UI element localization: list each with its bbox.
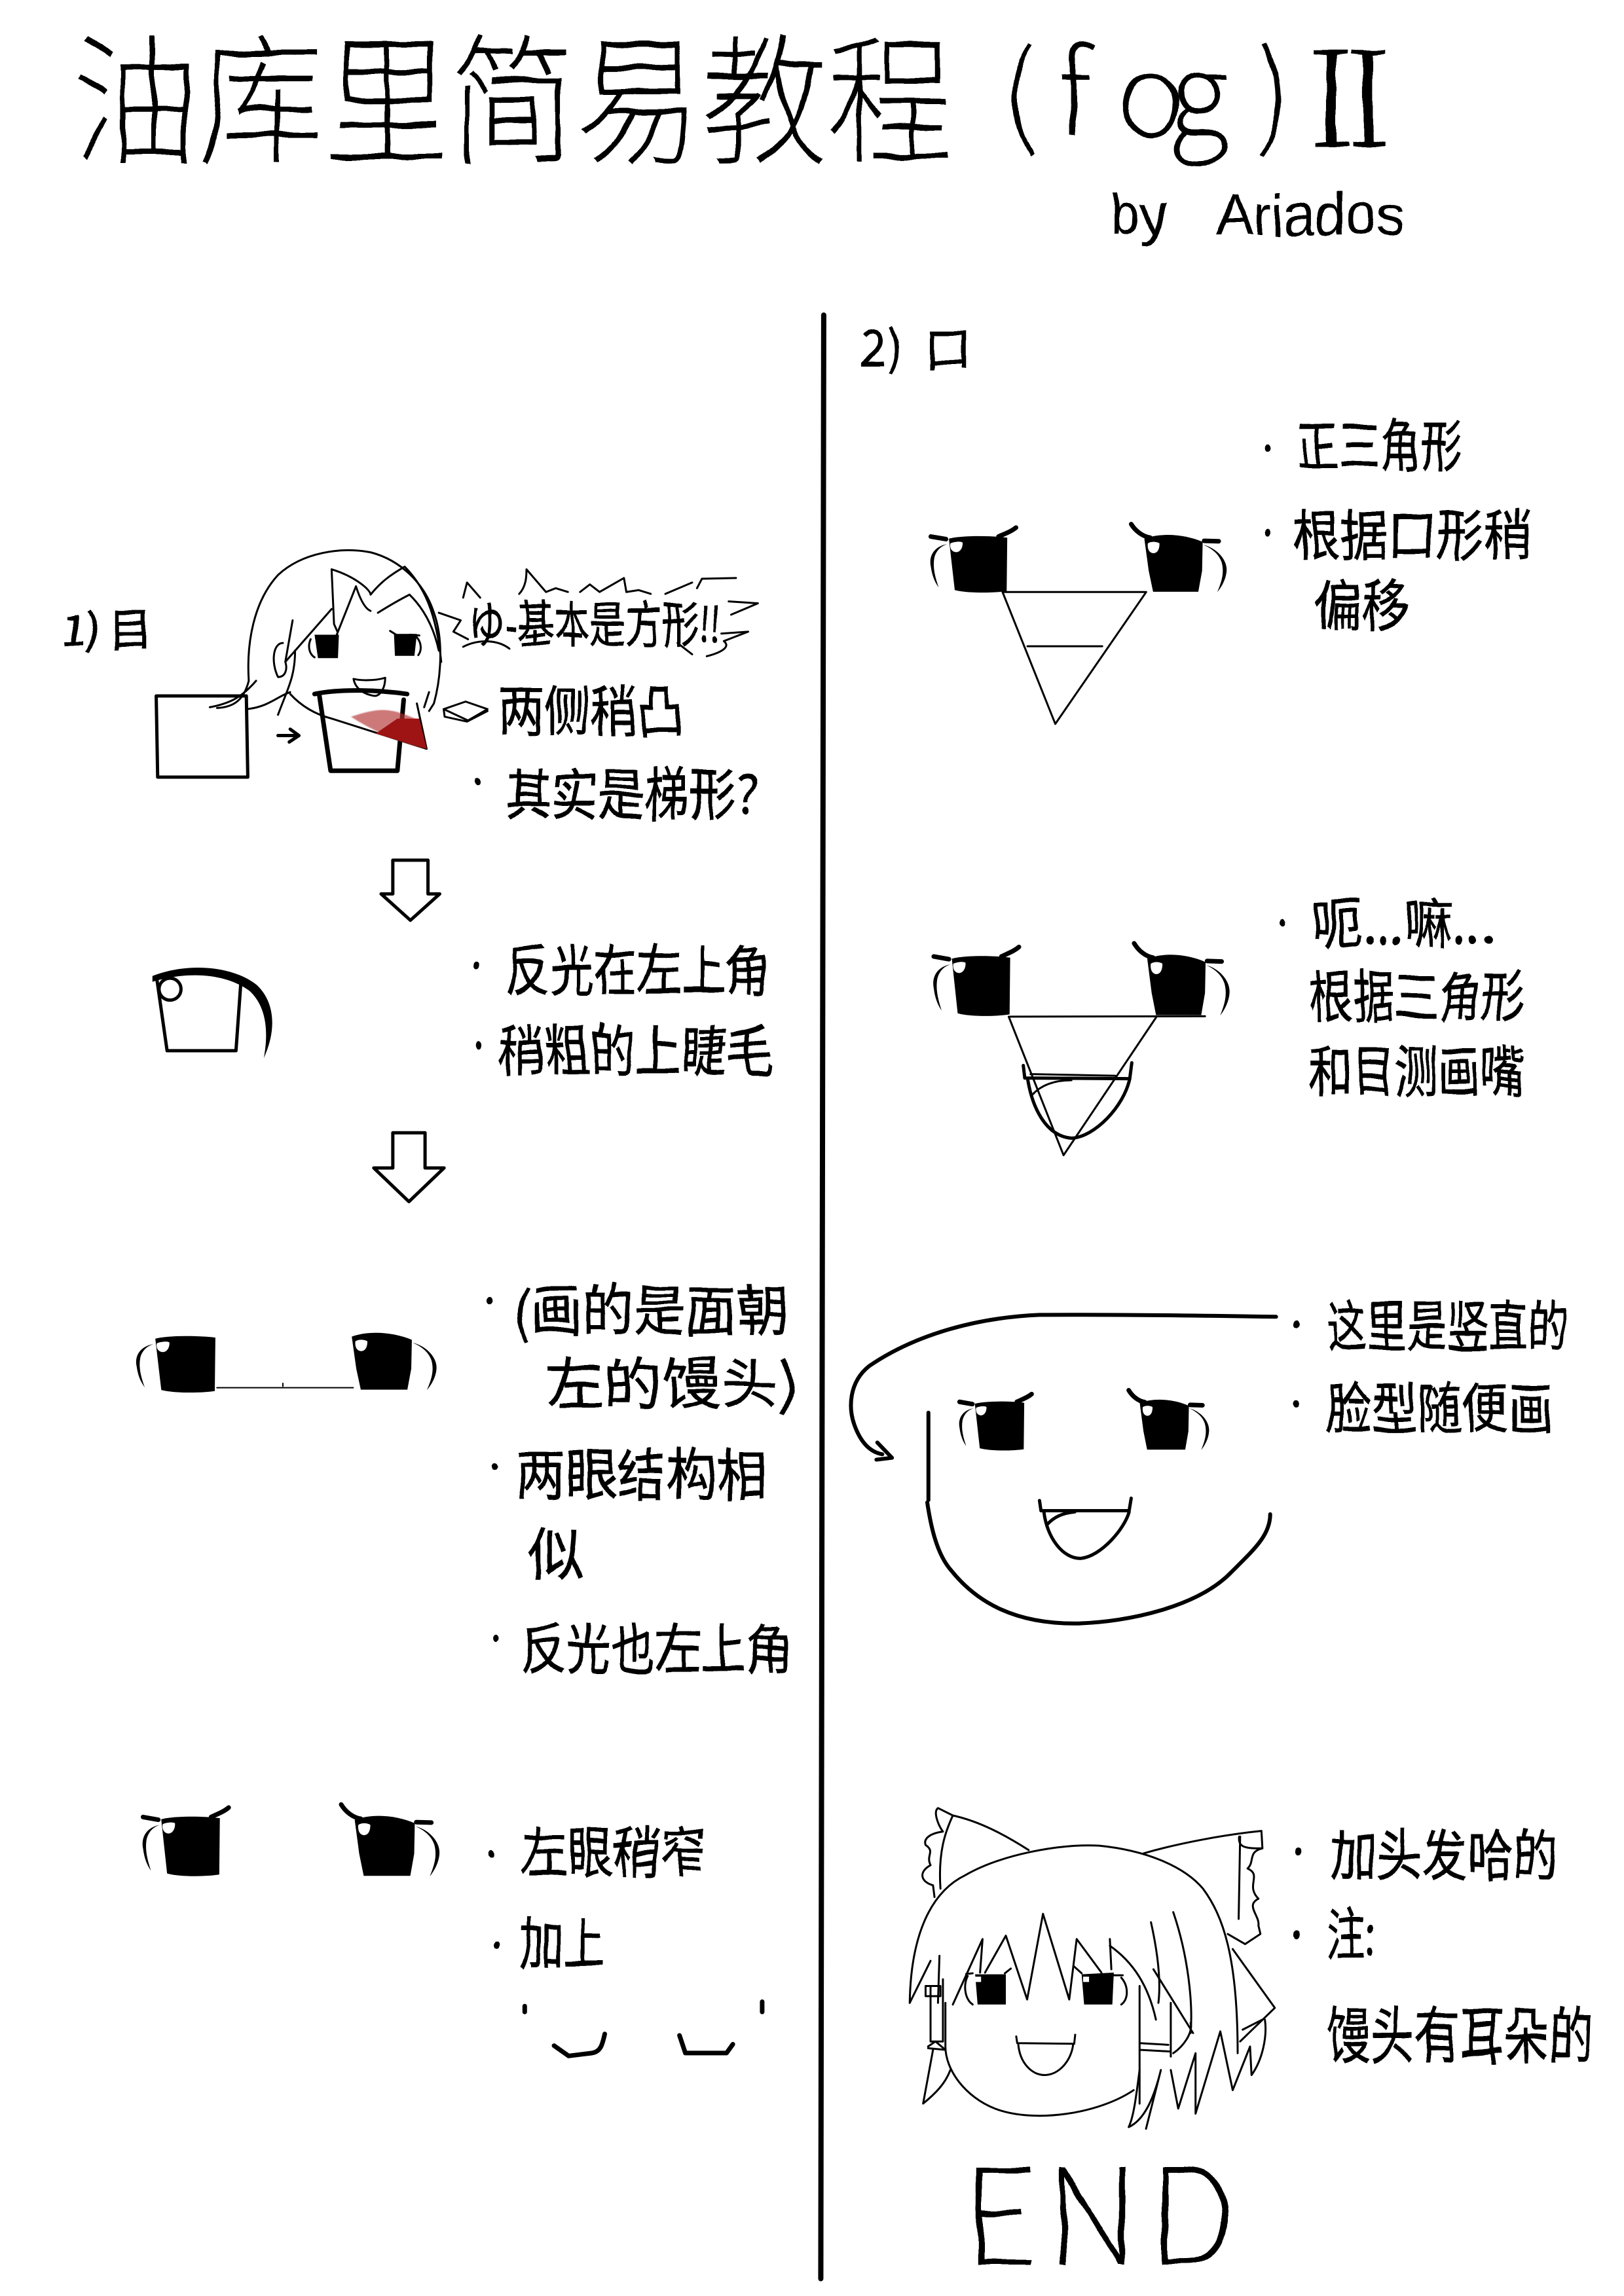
illustration: reimu yukkuri xyxy=(910,1808,1275,2129)
icon: eye pair front xyxy=(136,1333,437,1393)
text: offset by mouth shape xyxy=(1265,491,1532,642)
author credit: Ariados xyxy=(1217,181,1404,247)
arrow: down 1 xyxy=(381,860,439,920)
icon: bangs xyxy=(910,1912,1191,2033)
text: draw mouth by triangle: 根据三角形 xyxy=(1309,953,1524,1033)
text: highlight upper left: 反光在左上角 xyxy=(506,926,769,1007)
text: offset by mouth shape: 偏移 xyxy=(1313,562,1410,642)
text: facing left note: 左的馒头) xyxy=(545,1339,799,1420)
icon: mouth xyxy=(1016,2035,1075,2075)
title: Ⅱ xyxy=(1293,0,1407,184)
icon: bow left xyxy=(923,1808,1029,1897)
callout: basically square: ゆ-基本是方形!! xyxy=(469,586,721,656)
icon: side locks xyxy=(923,1969,1193,2104)
icon: square eye xyxy=(157,696,248,777)
text: draw mouth by triangle xyxy=(1309,953,1524,1108)
diagram: eyes triangle and mouth xyxy=(933,943,1230,1156)
text: facing left note xyxy=(488,1266,799,1420)
icon: eyes xyxy=(975,1973,1114,2005)
text: face shape free: 脸型随便画 xyxy=(1327,1364,1554,1445)
icon: face eyes xyxy=(959,1391,1209,1451)
text: draw mouth by triangle: 和目测画嘴 xyxy=(1309,1028,1524,1108)
icon: back hair spikes xyxy=(1129,1949,1275,2129)
icon: projector box xyxy=(444,702,487,721)
text: equilateral triangle: 正三角形 xyxy=(1297,402,1463,483)
icon: blood smear xyxy=(351,710,426,749)
text: facing left note: (画的是面朝 xyxy=(513,1266,788,1347)
text: both eyes similar: 似 xyxy=(528,1511,583,1592)
panel: section 2 mouth xyxy=(851,311,1593,2296)
text: add xyxy=(492,1899,605,1980)
text: sides slightly bulge: 两侧稍凸 xyxy=(498,667,683,748)
text: add: 加上 xyxy=(521,1899,605,1980)
centre divider xyxy=(821,315,824,2279)
author credit xyxy=(1109,181,1404,247)
arrow: curved to face side xyxy=(851,1315,1276,1460)
panel: section 1 eyes xyxy=(63,551,799,2056)
author credit: by xyxy=(1109,181,1168,247)
icon: lower lash marks xyxy=(525,2002,762,2056)
icon: trapezoid eye xyxy=(314,691,407,771)
text: thick upper lash: 稍粗的上睫毛 xyxy=(498,1007,773,1087)
text: actually trapezoid: 其实是梯形? xyxy=(506,751,758,831)
text: highlight also upper left: 反光也左上角 xyxy=(521,1605,792,1685)
text: note: 注: xyxy=(1327,1891,1376,1971)
icon: hair and head xyxy=(910,1846,1238,2116)
icon: lashes xyxy=(965,1967,1127,2005)
icon: face outline xyxy=(927,1413,1270,1624)
text: equilateral triangle xyxy=(1265,402,1463,483)
heading: section 1: 1)目 xyxy=(63,596,153,659)
icon: bow right xyxy=(1143,1831,1263,1944)
arrow: down 2 xyxy=(374,1133,444,1201)
arrow: square to trapezoid xyxy=(278,729,299,742)
icon: mini face xyxy=(314,634,417,658)
text: note xyxy=(1294,1891,1376,1971)
sketch: sakuya head over square and trapezoid xyxy=(157,551,758,777)
icon: red cut xyxy=(375,719,426,749)
icon: hair outline xyxy=(210,551,441,749)
text: offset by mouth shape: 根据口形稍 xyxy=(1293,491,1532,572)
text: umm: 呃...嘛... xyxy=(1312,879,1495,960)
icon: face mouth xyxy=(1039,1498,1131,1558)
icon: mini mouth xyxy=(354,631,419,696)
text: left eye narrower: 左眼稍窄 xyxy=(521,1809,707,1889)
heading: section 2: 2)口 xyxy=(860,311,972,381)
text: both eyes similar xyxy=(492,1430,767,1592)
icon: eye with highlight and lash xyxy=(153,968,272,1058)
icon: eye highlights xyxy=(975,1977,1089,1982)
icon: eye pair with ticks xyxy=(143,1804,439,1876)
icon: speech burst xyxy=(439,570,758,656)
diagram: eyes with triangle xyxy=(931,524,1227,724)
title: (fog) xyxy=(1001,3,1292,168)
text: both eyes similar: 两眼结构相 xyxy=(516,1430,767,1511)
diagram: face with curved arrow xyxy=(851,1315,1276,1624)
text: add hair: 加头发哈的 xyxy=(1331,1812,1558,1892)
